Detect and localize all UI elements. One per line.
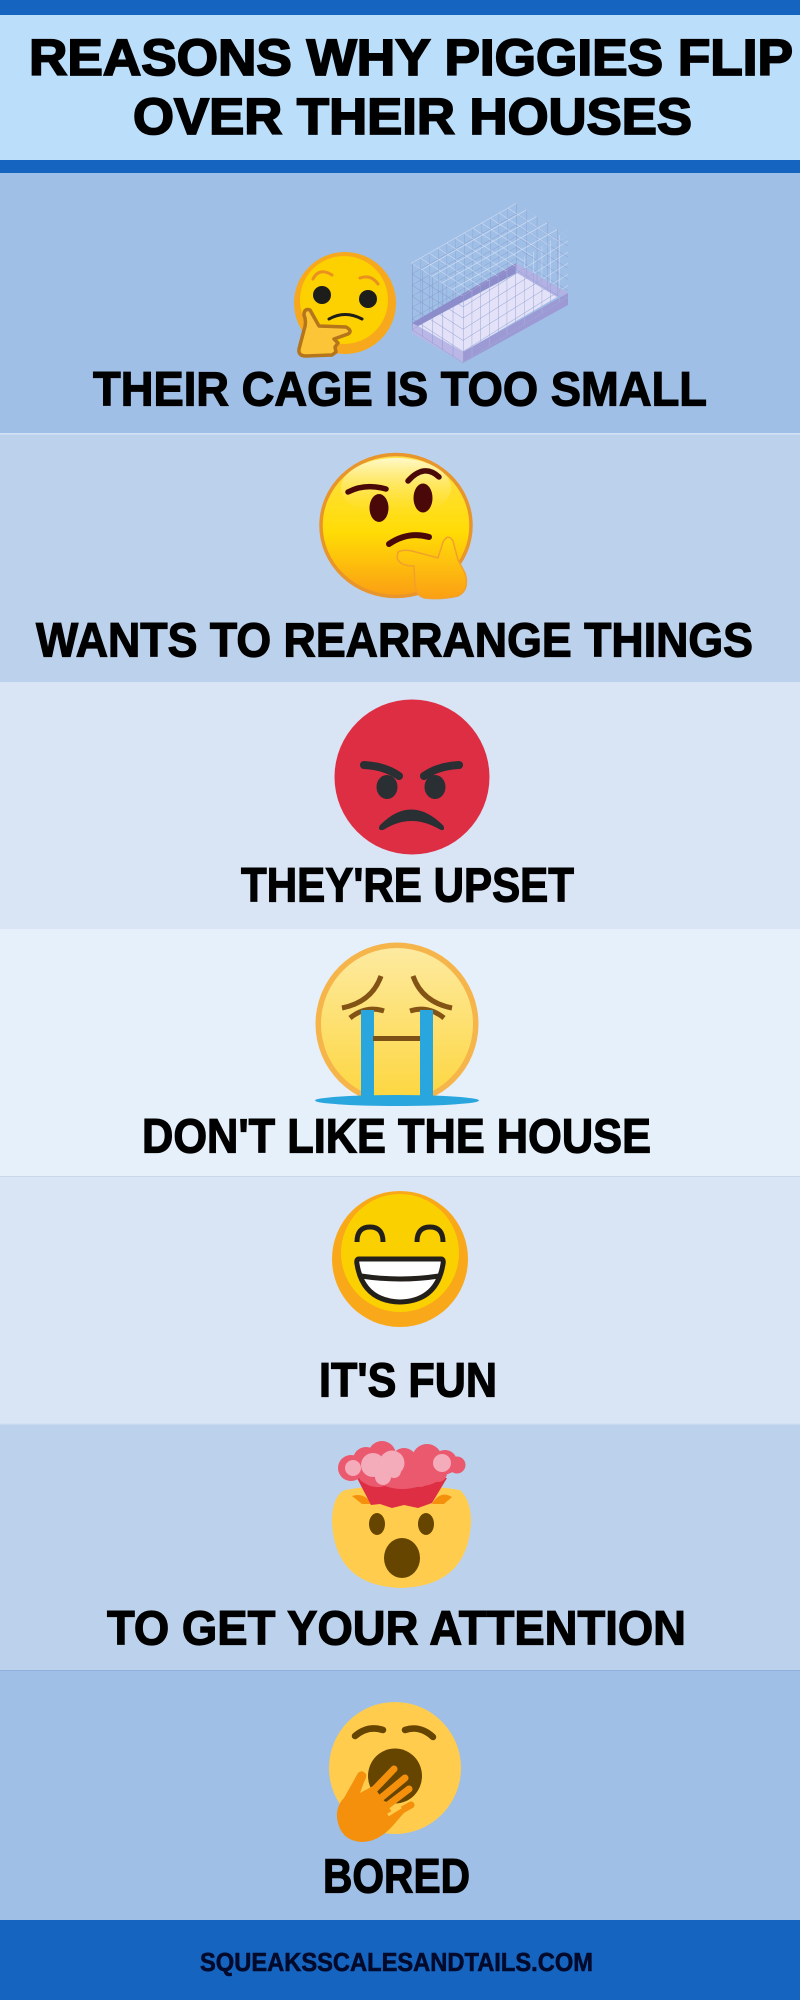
header divider bar bbox=[0, 160, 800, 173]
icon: cage bbox=[411, 203, 568, 363]
icon: thinking face large bbox=[321, 454, 471, 599]
top bar bbox=[0, 0, 800, 15]
icon: angry face bbox=[334, 700, 490, 854]
label: THEY'RE UPSET bbox=[241, 860, 574, 912]
icon: mind blown face bbox=[332, 1441, 471, 1588]
icon: crying face bbox=[315, 942, 479, 1106]
panel: wants to rearrange things bbox=[0, 433, 800, 682]
label: DON'T LIKE THE HOUSE bbox=[142, 1110, 651, 1164]
label: BORED bbox=[323, 1850, 470, 1904]
panel: they're upset bbox=[0, 682, 800, 929]
icon: yawning face bbox=[329, 1702, 461, 1842]
icon: grinning face bbox=[332, 1191, 468, 1327]
label: IT'S FUN bbox=[319, 1354, 497, 1408]
footer url: SQUEAKSSCALESANDTAILS.COM bbox=[200, 1947, 593, 1977]
panel: it's fun bbox=[0, 1176, 800, 1423]
title: REASONS WHY PIGGIES FLIP bbox=[29, 29, 793, 86]
label: TO GET YOUR ATTENTION bbox=[107, 1602, 686, 1656]
panel: their cage is too small bbox=[0, 173, 800, 433]
label: WANTS TO REARRANGE THINGS bbox=[36, 614, 753, 668]
title: OVER THEIR HOUSES bbox=[133, 88, 692, 145]
panel: bored bbox=[0, 1670, 800, 1920]
panel: to get your attention bbox=[0, 1423, 800, 1670]
header panel bbox=[0, 15, 800, 160]
panel: don't like the house bbox=[0, 929, 800, 1176]
label: THEIR CAGE IS TOO SMALL bbox=[93, 364, 707, 416]
title bbox=[29, 29, 793, 145]
icon: thinking face small bbox=[294, 252, 396, 356]
footer bbox=[0, 1920, 800, 2000]
